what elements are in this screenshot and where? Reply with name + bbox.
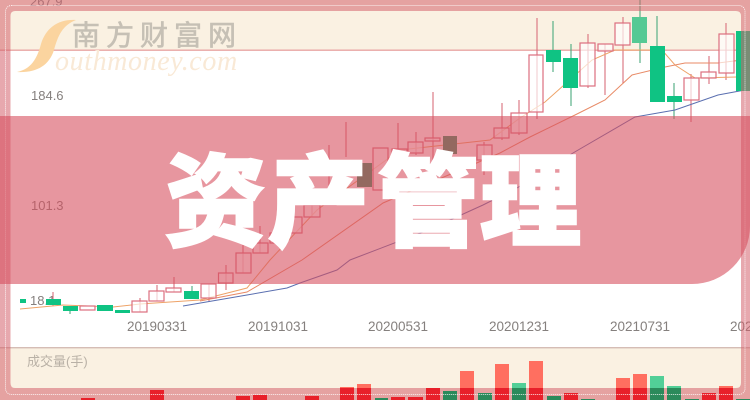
title [165, 148, 581, 260]
green (falling) candles [20, 17, 750, 313]
date axis labels [127, 319, 750, 334]
volume bars: red [340, 361, 733, 388]
date axis labels: 20210731 [610, 319, 670, 334]
date axis labels: 20200531 [368, 319, 428, 334]
title: 管 [378, 148, 479, 260]
price axis labels [30, 0, 64, 308]
volume bars: lower saturated section over frame [81, 388, 750, 400]
watermark: southmoney logo [17, 20, 242, 77]
candle wicks [53, 17, 726, 312]
date axis labels: 20190331 [127, 319, 187, 334]
watermark: southmoney logo: 南方财富网 [72, 20, 242, 51]
price axis labels: 184.6 [31, 88, 64, 103]
date axis labels: 20201231 [489, 319, 549, 334]
volume bars: green [512, 376, 681, 388]
hollow (rising) candles [80, 23, 734, 312]
title: 产 [268, 148, 369, 260]
price axis labels: 101.3 [31, 198, 64, 213]
price axis labels: 18.1 [30, 293, 55, 308]
volume label: 成交量(手) [27, 354, 88, 369]
watermark: southmoney logo: outhmoney.com [55, 46, 238, 77]
green candle wicks [70, 0, 674, 314]
translucent title banner [0, 116, 750, 284]
date axis labels: 20191031 [248, 319, 308, 334]
moving average lines [20, 50, 745, 309]
title: 资 [165, 148, 266, 260]
title: 理 [480, 148, 581, 260]
